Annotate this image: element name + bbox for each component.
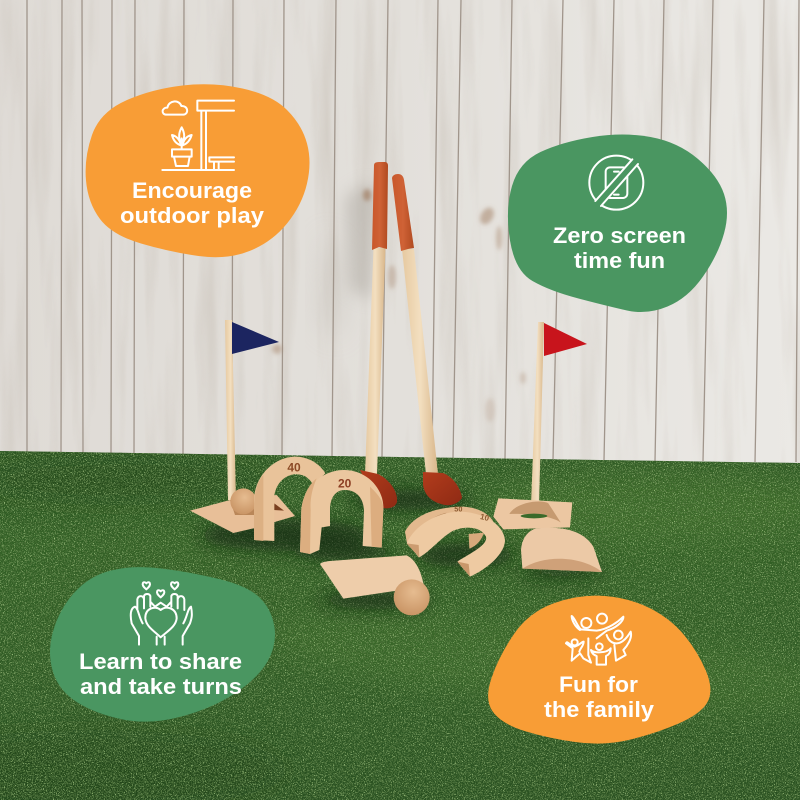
ball in front [394,579,430,615]
text: fun for the family: Fun for [559,672,638,697]
text: encourage outdoor play: Encourage [132,178,252,203]
text: encourage outdoor play: outdoor play [120,203,265,228]
panel: encourage outdoor play [86,84,309,257]
panel: fun for the family [488,596,710,744]
text: learn to share and take turns: Learn to share [79,649,242,674]
wall: white wooden planks [0,0,800,470]
text: zero screen time fun: Zero screen [553,223,686,248]
wooden pieces [190,457,602,615]
grass lawn [0,440,800,800]
ball on left base [230,488,256,514]
icon: family cheering [566,614,631,665]
arch numbered 40: 40 [287,460,301,474]
golf club left [360,162,397,508]
panel: learn to share and take turns [50,567,275,722]
ramp piece centre [320,555,424,599]
flat arch numbered 50 and 10 [405,505,505,577]
base with blue flag [190,495,295,533]
flat arch numbered 50 and 10: 50 [454,505,462,514]
text: learn to share and take turns: and take turns [80,674,242,699]
icon: crossed out phone [589,156,643,210]
arch numbered 20 [300,470,383,554]
panel: zero screen time fun [508,134,727,312]
blue flag [225,320,279,500]
base with red flag [493,498,572,529]
red flag [531,322,587,505]
text: fun for the family: the family [544,697,655,722]
shadows under game pieces [200,490,602,609]
icon: hands holding a heart [131,582,192,645]
flat arch numbered 50 and 10: 10 [479,512,491,523]
golf club right [392,174,462,505]
arch numbered 20: 20 [338,476,352,490]
arch numbered 40 [254,457,325,541]
text: zero screen time fun: time fun [574,248,665,273]
ramp piece right [521,528,602,572]
icon: plant, bench and cloud [162,101,234,170]
